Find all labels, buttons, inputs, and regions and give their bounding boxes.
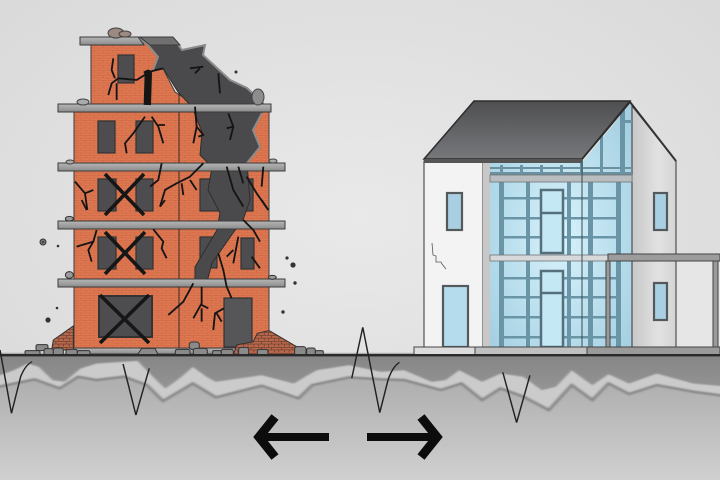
- glass atrium: [490, 102, 632, 347]
- house windows: [447, 193, 667, 320]
- seismic wave spikes: [0, 327, 530, 423]
- flying debris dots: [40, 70, 297, 323]
- wavy soil band: [0, 361, 720, 410]
- foundation: [414, 347, 720, 355]
- floor bands: [490, 175, 632, 261]
- canopy beam and posts: [606, 254, 720, 347]
- extension wall: [676, 261, 720, 347]
- cracks upper: [75, 58, 268, 210]
- gable outline: [582, 102, 676, 161]
- roof debris: [66, 28, 277, 164]
- hole edge: [137, 37, 263, 163]
- dark topsoil layer: [0, 353, 720, 390]
- ground cross-section: [0, 353, 720, 480]
- rubble piles: [25, 216, 323, 355]
- eave: [424, 159, 582, 163]
- pillar: [483, 163, 490, 347]
- brick building, collapsing: [25, 28, 323, 355]
- arrow: left: [259, 417, 329, 457]
- hairline crack: [432, 243, 446, 269]
- floor slabs: [58, 37, 285, 354]
- modern glass house: [414, 101, 720, 355]
- left white wall: [424, 161, 483, 347]
- upper and lower glass doors: [541, 190, 563, 347]
- ground line: [0, 354, 720, 356]
- crossed-out windows: [100, 174, 149, 343]
- arrow: right: [367, 417, 437, 457]
- front door: [443, 286, 468, 347]
- glazing frames: [490, 110, 632, 347]
- brick walls: [74, 43, 269, 348]
- right gable wall: [632, 106, 676, 347]
- collapse hole: [137, 37, 263, 282]
- cracks lower: [77, 200, 268, 330]
- windows: [98, 55, 254, 347]
- roof: [424, 101, 630, 159]
